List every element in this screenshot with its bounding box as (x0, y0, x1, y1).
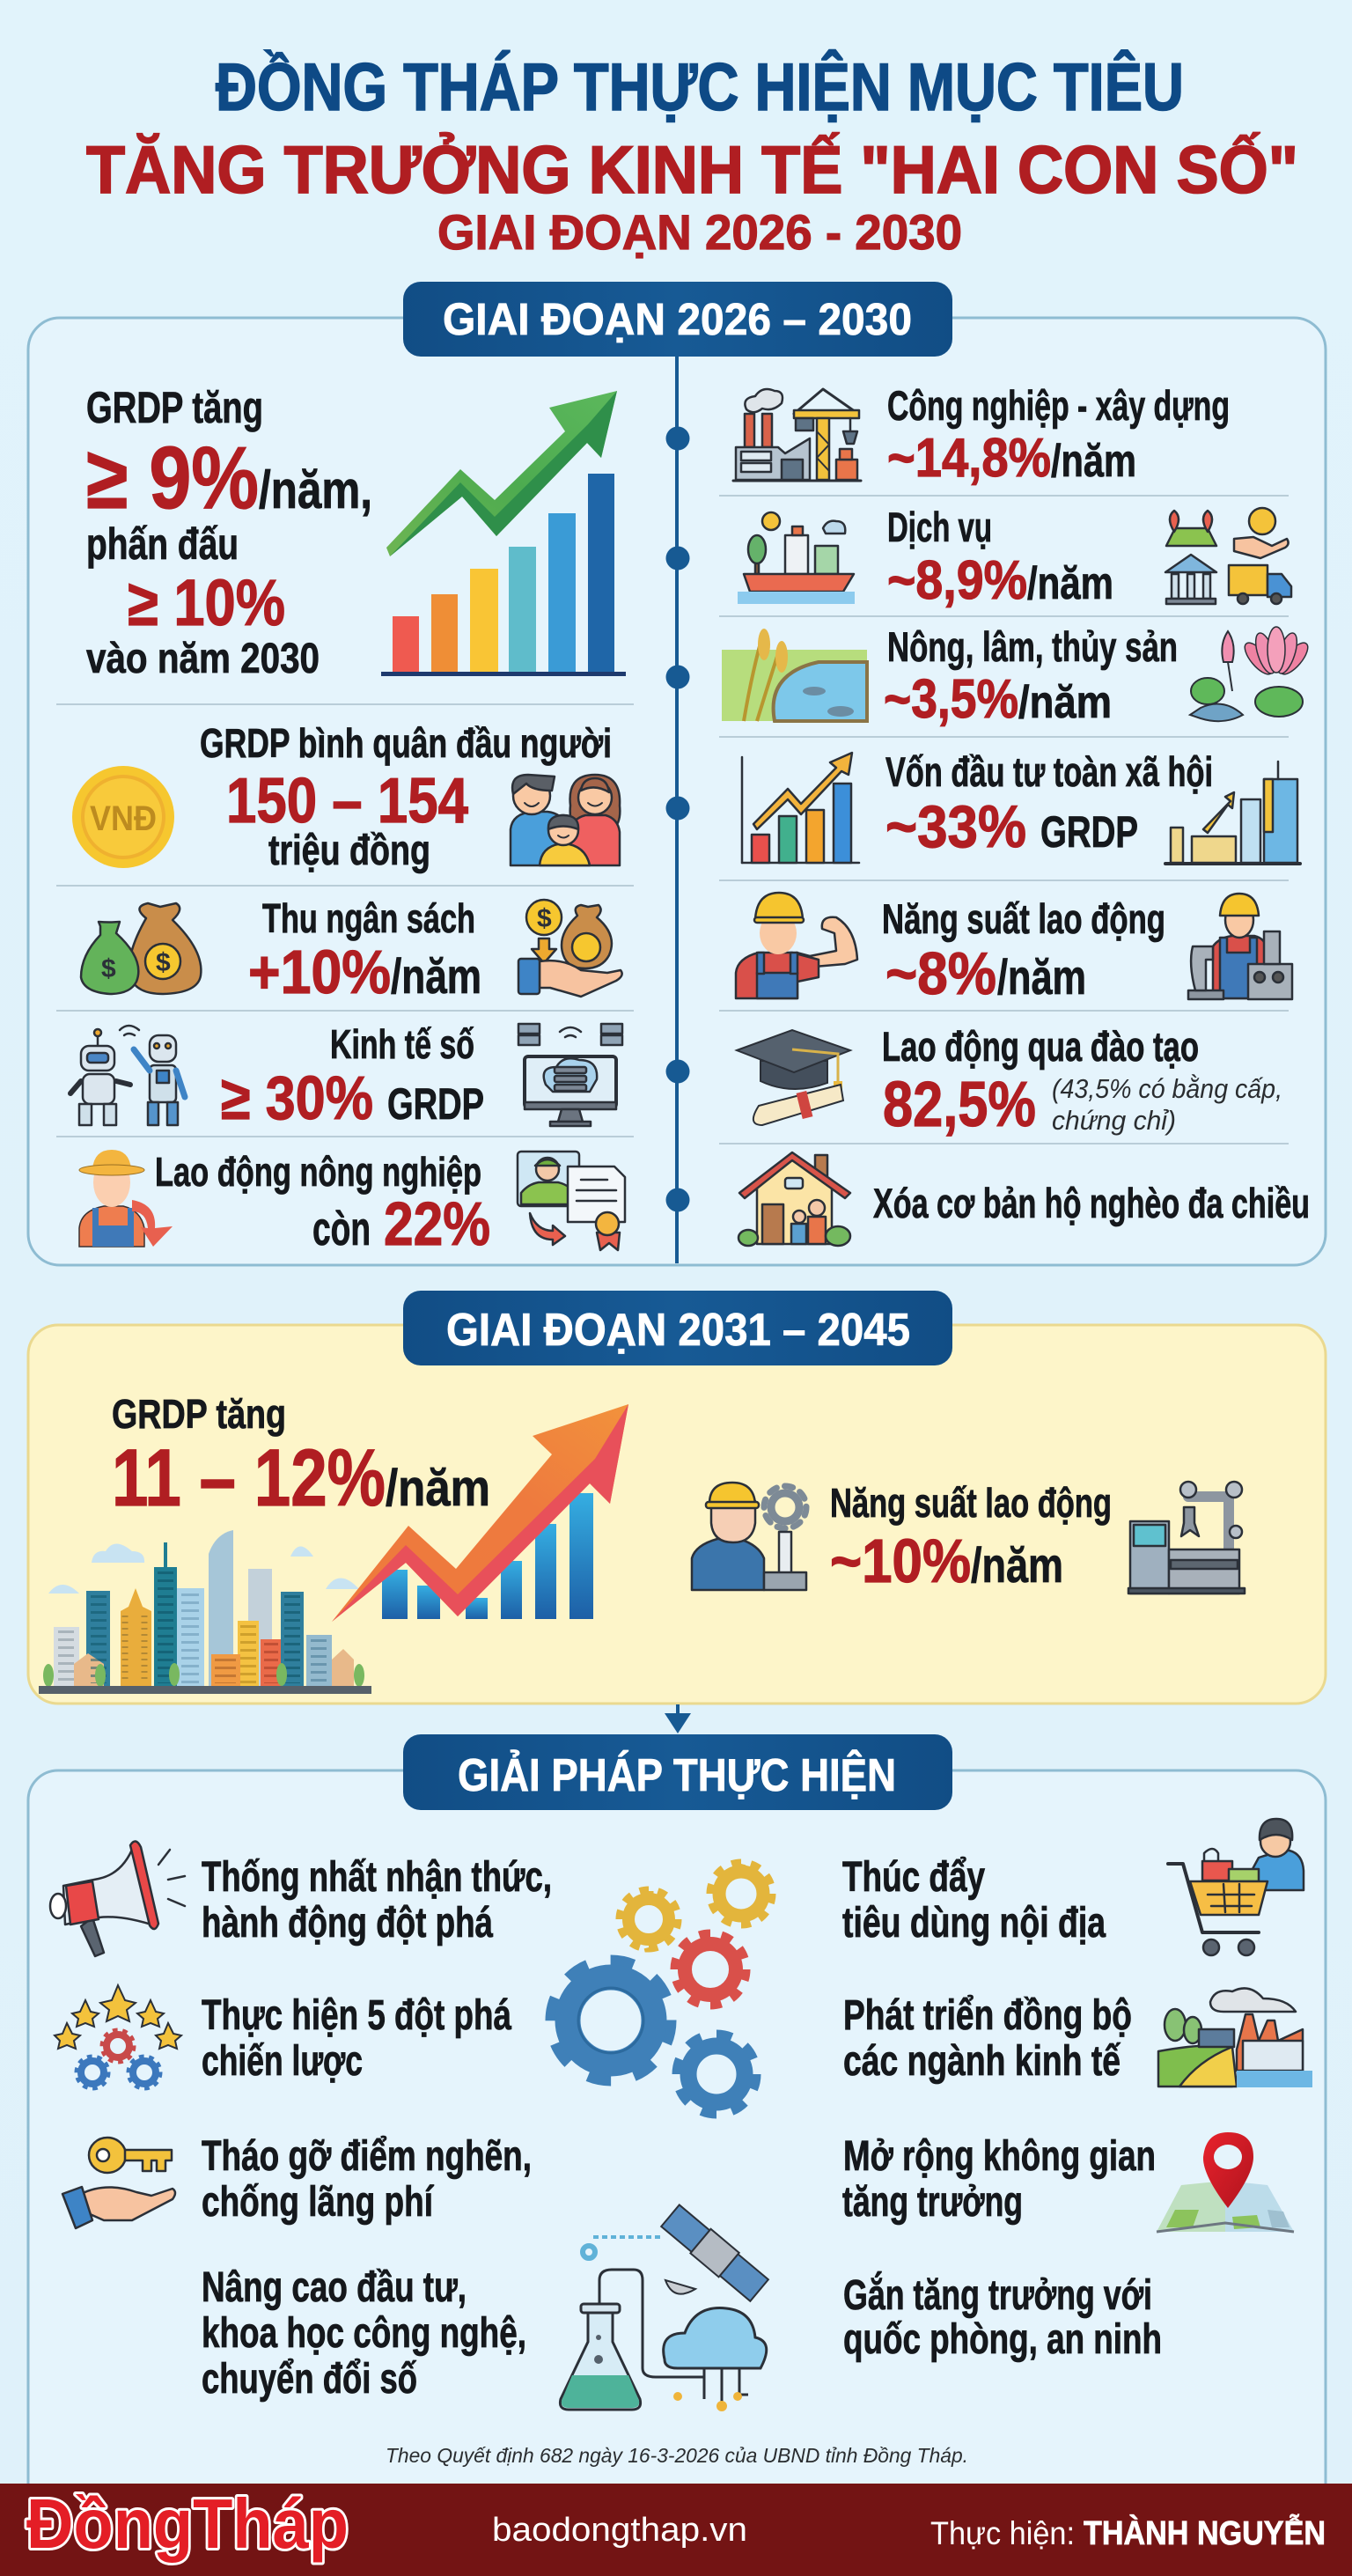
tab: giai đoạn 2031-2045 (403, 1291, 952, 1365)
icon: rice field and pond (722, 629, 867, 721)
solutions right column: các ngành kinh tế (843, 2038, 1121, 2085)
labour productivity 2031-2045 text: /năm (971, 1537, 1063, 1593)
panel: giai đoạn 2026-2030 (28, 318, 1326, 1265)
labour productivity (882, 895, 1165, 1007)
icon: robots (70, 1026, 185, 1125)
GRDP per capita: triệu đồng (268, 828, 430, 874)
timeline (665, 357, 690, 1263)
solutions left column: Tháo gỡ điểm nghẽn, (202, 2133, 532, 2180)
icon: gears cluster (553, 1864, 771, 2113)
icon: map pins (1166, 511, 1216, 546)
GRDP per capita: GRDP bình quân đầu người (200, 720, 612, 766)
trained labour: chứng chỉ) (1052, 1105, 1176, 1136)
tab: giai đoạn 2026-2030: GIAI ĐOẠN 2026 – 2030 (443, 294, 912, 344)
digital economy text: Kinh tế số (330, 1021, 474, 1067)
icon: hand holding money bag (518, 900, 622, 997)
GRDP growth 2031-2045 text: 11 – 12% (112, 1433, 386, 1523)
agriculture, forestry, fishery: /năm (1018, 677, 1112, 728)
solutions left column: Nâng cao đầu tư, (202, 2264, 467, 2311)
icon: stars and gears (55, 1985, 181, 2088)
icon: robot arm machine (1128, 1482, 1245, 1593)
icon: family (511, 775, 620, 865)
agricultural labour text (155, 1149, 490, 1258)
icon: worker certificate (518, 1152, 625, 1250)
GRDP growth text: phấn đấu (86, 519, 239, 569)
icon: delivery truck (1229, 565, 1291, 604)
title: GIAI ĐOẠN 2026 - 2030 (437, 204, 962, 260)
digital economy text: GRDP (387, 1079, 484, 1129)
skyline illustration (39, 1530, 371, 1694)
GRDP growth text: ≥ 10% (128, 566, 285, 639)
icon: house with family (738, 1152, 850, 1246)
labour productivity: ~8% (885, 940, 996, 1007)
logo: ĐồngTháp (26, 2484, 349, 2563)
budget revenue text: /năm (391, 948, 481, 1004)
GRDP growth text: GRDP tăng (86, 383, 263, 432)
labour productivity 2031-2045 text: ~10% (830, 1527, 971, 1595)
industry and construction: Công nghiệp - xây dựng (887, 382, 1230, 429)
icon: lotus and fish (1190, 627, 1312, 721)
tab: giai đoạn 2031-2045: GIAI ĐOẠN 2031 – 2045 (446, 1305, 910, 1356)
credit: Thực hiện: (930, 2515, 1075, 2551)
icon: money bags (81, 903, 201, 994)
GRDP growth text: /năm, (259, 460, 372, 519)
title (86, 49, 1298, 260)
solutions right column: Mở rộng không gian (843, 2133, 1156, 2180)
digital economy text: ≥ 30% (221, 1064, 373, 1132)
icon: port ship (738, 512, 855, 604)
credit: THÀNH NGUYỄN (1084, 2513, 1326, 2552)
solutions left column: chiến lược (202, 2038, 363, 2085)
agricultural labour text: Lao động nông nghiệp (155, 1149, 481, 1195)
icon: investment chart (742, 753, 859, 863)
rising arrow with bars (332, 1404, 628, 1622)
solutions left column: hành động đột phá (202, 1900, 493, 1947)
industry and construction (887, 382, 1230, 489)
icon: key over hand (62, 2138, 175, 2228)
solutions right column: tăng trưởng (842, 2179, 1023, 2226)
title: ĐỒNG THÁP THỰC HIỆN MỤC TIÊU (216, 49, 1184, 125)
icon: engineer with gear (692, 1483, 806, 1590)
website: baodongthap.vn (492, 2512, 747, 2549)
total social investment (885, 748, 1213, 860)
labour productivity: Năng suất lao động (882, 895, 1165, 942)
GRDP growth text: ≥ 9% (86, 429, 259, 527)
labour productivity 2031-2045 text (830, 1480, 1112, 1595)
solutions left column (202, 1854, 552, 2403)
services: Dịch vụ (887, 504, 992, 550)
trained labour: 82,5% (883, 1070, 1036, 1140)
trained labour: (43,5% có bằng cấp, (1052, 1073, 1282, 1104)
GRDP growth 2031-2045 text: /năm (386, 1460, 490, 1517)
GRDP growth text (86, 383, 372, 682)
tab: giai đoạn 2026-2030 (403, 282, 952, 357)
icon: hand holding money bag: $ (537, 904, 552, 933)
budget revenue text: +10% (248, 938, 391, 1006)
total social investment: Vốn đầu tư toàn xã hội (885, 748, 1213, 795)
icon: money bags: $ (156, 948, 171, 977)
budget revenue text: Thu ngân sách (262, 895, 475, 941)
digital economy text (221, 1021, 484, 1132)
solutions left column: chuyển đổi số (202, 2356, 417, 2403)
total social investment: GRDP (1040, 807, 1138, 857)
icon: shopping cart and person (1168, 1819, 1304, 1955)
GRDP growth 2031-2045 text: GRDP tăng (112, 1391, 286, 1437)
labour productivity: /năm (997, 949, 1086, 1005)
services (887, 504, 1113, 611)
icon: hand with coin (1234, 508, 1289, 558)
icon: megaphone (50, 1841, 185, 1956)
icon: city growth (1165, 762, 1300, 864)
icon: factory and crane (733, 389, 861, 481)
title: TĂNG TRƯỞNG KINH TẾ "HAI CON SỐ" (86, 133, 1298, 208)
credit (930, 2513, 1326, 2552)
solutions left column: Thống nhất nhận thức, (202, 1854, 552, 1901)
GRDP growth 2031-2045 text (112, 1391, 490, 1523)
solutions right column: quốc phòng, an ninh (843, 2316, 1162, 2363)
tab: giải pháp thực hiện: GIẢI PHÁP THỰC HIỆN (458, 1749, 896, 1801)
icon: map pin (1157, 2132, 1294, 2232)
agriculture, forestry, fishery: ~3,5% (884, 669, 1018, 730)
trained labour (882, 1023, 1282, 1140)
icon: farmer with down arrow (79, 1150, 173, 1247)
agricultural labour text: 22% (384, 1189, 490, 1258)
icon: farm and factory (1158, 1988, 1312, 2087)
source note: Theo Quyết định 682 ngày 16-3-2026 của UBND tỉnh Đồng Tháp. (386, 2444, 968, 2467)
icon: bank (1165, 555, 1216, 604)
icon: VND coin: VNĐ (90, 799, 157, 838)
solutions left column: khoa học công nghệ, (202, 2310, 526, 2357)
icon: worker at machine (1188, 894, 1292, 999)
industry and construction: /năm (1051, 436, 1136, 487)
icon: money bags: $ (101, 954, 116, 983)
footer (0, 2484, 1352, 2576)
agricultural labour text: còn (312, 1203, 371, 1255)
GRDP per capita (200, 720, 612, 874)
labour productivity 2031-2045 text: Năng suất lao động (830, 1480, 1112, 1526)
icon: science flask, satellite, cloud (560, 2204, 769, 2411)
GRDP per capita: 150 – 154 (226, 766, 468, 836)
solutions right column: Phát triển đồng bộ (843, 1992, 1132, 2039)
solutions left column: Thực hiện 5 đột phá (202, 1992, 511, 2039)
agriculture, forestry, fishery: Nông, lâm, thủy sản (887, 623, 1178, 670)
panel: giai đoạn 2031-2045 (28, 1325, 1326, 1704)
solutions right column: tiêu dùng nội địa (842, 1900, 1106, 1947)
tab: giải pháp thực hiện (403, 1734, 952, 1810)
trained labour: Lao động qua đào tạo (882, 1023, 1199, 1070)
services: /năm (1027, 558, 1113, 609)
solutions right column: Thúc đẩy (842, 1854, 985, 1901)
icon: VND coin (72, 766, 174, 868)
icon: cloud monitor (518, 1024, 622, 1126)
bar chart with green arrow (381, 391, 626, 676)
industry and construction: ~14,8% (887, 428, 1051, 489)
panel: giải pháp thực hiện (28, 1770, 1326, 2528)
GRDP growth text: vào năm 2030 (86, 636, 320, 682)
solutions right column: Gắn tăng trưởng với (843, 2271, 1152, 2319)
solutions left column: chống lãng phí (202, 2179, 434, 2226)
icon: strong worker (736, 893, 857, 998)
arrow down (665, 1704, 691, 1733)
icon: graduation cap (737, 1030, 850, 1125)
solutions right column (842, 1854, 1162, 2363)
total social investment: ~33% (885, 793, 1026, 860)
agriculture, forestry, fishery (884, 623, 1178, 730)
budget revenue text (248, 895, 481, 1006)
services: ~8,9% (887, 550, 1027, 611)
